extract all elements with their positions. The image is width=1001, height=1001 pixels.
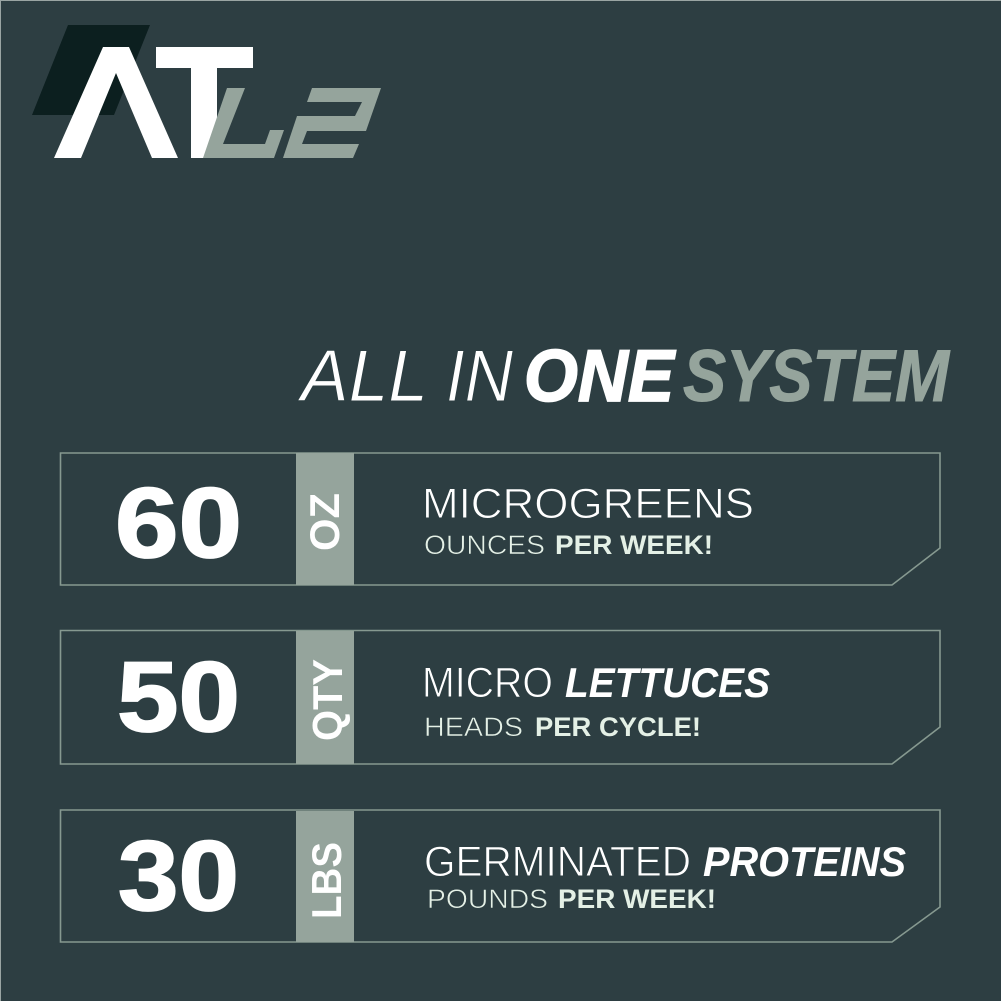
sublabel: pounds per week: PER WEEK! [558, 884, 716, 914]
number: 30: 30 [118, 820, 239, 931]
unit band: oz: OZ [301, 493, 348, 551]
sublabel: pounds per week [427, 884, 716, 914]
logo: AT L2 [32, 25, 381, 158]
title: all in one system: ONE [524, 336, 676, 417]
label: germinated proteins [424, 838, 906, 886]
title: all in one system: SYSTEM [683, 336, 951, 417]
sublabel: ounces per week: PER WEEK! [555, 530, 713, 560]
sublabel: ounces per week [424, 530, 713, 560]
label: germinated proteins: PROTEINS [703, 838, 906, 885]
label: micro lettuces: LETTUCES [565, 659, 770, 706]
unit band: oz [296, 453, 354, 585]
unit band: lbs [296, 811, 354, 942]
unit band: lbs: LBS [303, 842, 350, 919]
unit band: qty [296, 631, 354, 764]
sublabel: heads per cycle [424, 712, 701, 742]
panel: germinated proteins [60, 810, 940, 942]
label: micro lettuces: MICRO [422, 659, 553, 707]
sublabel: heads per cycle: HEADS [424, 712, 523, 742]
title: all in one system [297, 336, 951, 417]
panel: micro lettuces [60, 630, 940, 764]
sublabel: ounces per week: OUNCES [424, 530, 545, 560]
number: 50: 50 [117, 641, 240, 752]
label: germinated proteins: GERMINATED [424, 838, 691, 886]
sublabel: heads per cycle: PER CYCLE! [535, 712, 701, 742]
label: microgreens: MICROGREENS [422, 480, 754, 528]
title: all in one system: ALL [297, 336, 428, 417]
title: all in one system: IN [446, 336, 513, 417]
sublabel: pounds per week: POUNDS [427, 884, 548, 914]
panel: microgreens [60, 453, 940, 585]
unit band: qty: QTY [304, 659, 351, 741]
number: 60: 60 [115, 467, 242, 578]
label: micro lettuces [422, 659, 770, 707]
